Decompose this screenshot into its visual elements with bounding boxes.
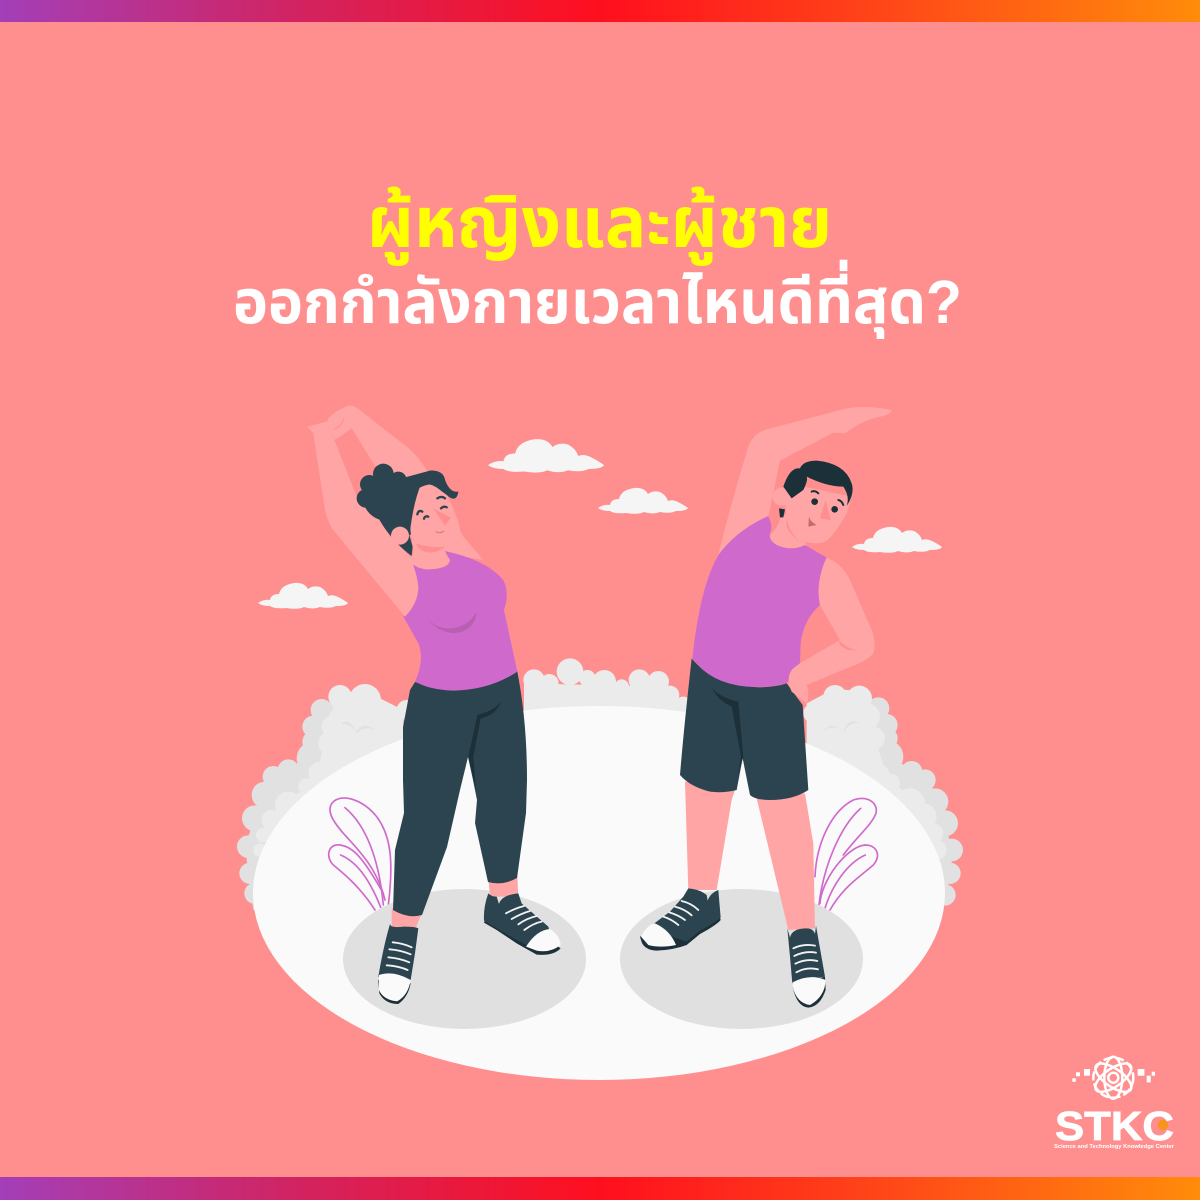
head [410, 484, 460, 547]
right shoe [787, 926, 826, 1008]
plant left [329, 798, 391, 910]
tank top [403, 551, 517, 691]
cloud top centre [488, 439, 604, 473]
left shoe [378, 924, 418, 1004]
cloud right [852, 527, 942, 553]
cloud left [258, 583, 348, 609]
plant right [815, 799, 877, 910]
hair [783, 461, 853, 506]
bush left [237, 684, 417, 910]
man upper body [692, 407, 892, 703]
front arm [307, 422, 418, 617]
bush right [803, 685, 963, 907]
woman upper body [307, 406, 517, 691]
bottom gradient bar [0, 1177, 1200, 1200]
back arm [327, 406, 483, 560]
raised arm [718, 407, 892, 555]
logo STKC [1054, 1057, 1175, 1150]
hair fringe [402, 471, 458, 532]
logo wordmark: STKC [1055, 1103, 1174, 1149]
title: ออกกำลังกายเวลาไหนดีที่สุด? [233, 259, 962, 339]
man legs [640, 780, 826, 1008]
foot shadow left [343, 889, 586, 1029]
leggings fold [468, 700, 502, 790]
hair [357, 464, 458, 556]
foot shadow right [620, 889, 863, 1029]
title [233, 184, 962, 339]
woman leggings [393, 670, 527, 916]
tank top [692, 516, 827, 687]
man [640, 407, 892, 1008]
neck [408, 540, 450, 569]
head [786, 483, 852, 543]
face features [417, 497, 447, 519]
neck [770, 513, 807, 548]
title: ผู้หญิงและผู้ชาย [367, 184, 832, 266]
logo dot [1158, 1120, 1168, 1130]
ear [391, 527, 409, 545]
woman [307, 406, 561, 1004]
man shorts [680, 658, 808, 800]
logo subtitle: Science and Technology Knowledge Center [1054, 1144, 1175, 1150]
right shoe [484, 893, 561, 955]
top gradient bar [0, 0, 1200, 22]
woman lower legs and shoes [378, 875, 561, 1004]
bush centre [523, 658, 692, 723]
left shoe [640, 888, 721, 951]
ground [253, 706, 945, 1080]
face features [811, 498, 818, 505]
cloud middle [598, 488, 688, 514]
right arm [789, 558, 875, 703]
icon: atom [1072, 1057, 1155, 1099]
ear [773, 488, 791, 506]
